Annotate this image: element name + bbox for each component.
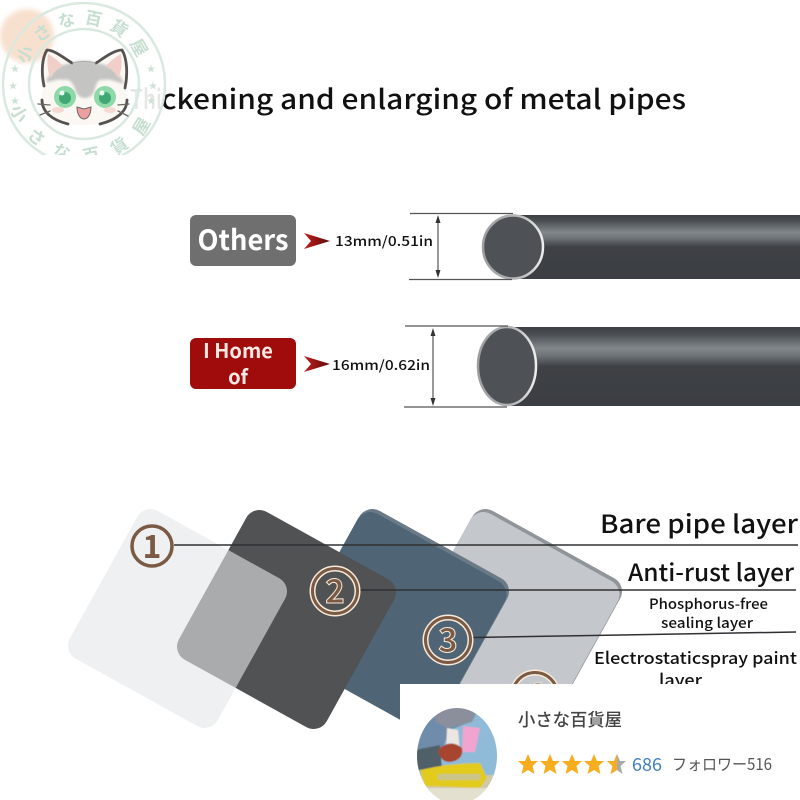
layer labels [594, 505, 799, 691]
stamp ring: ★ [148, 79, 158, 92]
logo stamp: shop cat badge [0, 2, 166, 155]
stamp ring: ★ [146, 62, 156, 75]
tile 1: bare pipe [83, 524, 272, 713]
dimension lines [404, 326, 508, 407]
label: electrostatic spray paint layer: layer [659, 667, 702, 691]
review count: 686 [632, 751, 662, 777]
card background [400, 684, 800, 800]
label: Others: Others [198, 219, 288, 259]
label: electrostatic spray paint layer [594, 645, 798, 691]
layered tiles diagram [83, 524, 607, 716]
followers: フォロワー516 [672, 751, 772, 775]
shop name: 小さな百貨屋 [518, 707, 622, 732]
arrow: red pointer [304, 233, 330, 249]
label: electrostatic spray paint layer: Electrostaticspray paint [594, 645, 798, 669]
label: phosphorus-free sealing layer [649, 594, 768, 633]
comparison row: I Home of [190, 326, 800, 407]
stamp ring: 小さな百貨屋 [10, 106, 152, 155]
stamp ring: ★ [10, 62, 20, 75]
number badge 4: 4 [525, 669, 545, 717]
stamp ring: ★ [10, 94, 20, 107]
number badge 1 [132, 522, 172, 568]
leader lines [174, 545, 798, 638]
label: I Home of: I Home [203, 335, 273, 364]
stamp ring: ★ [8, 79, 18, 92]
cat fur patch [46, 61, 124, 98]
stamp ring [2, 2, 166, 155]
comparison row: others [190, 214, 800, 280]
title: ckening and enlarging of metal pipes [161, 78, 686, 117]
arrow: red pointer [304, 356, 330, 372]
label: I Home of [190, 335, 296, 390]
dimension: 16mm: 16mm/0.62in [332, 354, 430, 374]
label: Others [190, 215, 296, 266]
number badge 2 [312, 565, 358, 614]
stamp ring: ★ [146, 94, 156, 107]
pipe: 13mm [483, 215, 800, 279]
number badge 2: 2 [325, 565, 345, 613]
pipe: 16mm [478, 327, 800, 406]
tile 4: spray paint [416, 524, 607, 716]
label: anti-rust layer: Anti-rust layer [628, 553, 794, 588]
dimension lines [409, 214, 513, 280]
tile 2: anti-rust [192, 525, 381, 714]
icon: cat face [38, 50, 129, 125]
number badge 1: 1 [143, 522, 161, 568]
label: phosphorus-free sealing layer: sealing layer [661, 613, 753, 633]
tile 3: sealing layer [303, 524, 494, 716]
stamp ring: 小さな百貨屋 [18, 10, 149, 62]
shop card [400, 684, 800, 800]
star rating [518, 754, 626, 774]
label: bare pipe layer: Bare pipe layer [600, 505, 799, 541]
title: Thi [130, 78, 162, 117]
label: I Home of: of [228, 361, 249, 390]
number badge 3: 3 [438, 614, 458, 662]
dimension: 13mm: 13mm/0.51in [335, 230, 433, 250]
shop avatar [415, 706, 499, 800]
stamp blossom [0, 9, 54, 63]
number badge 3 [426, 614, 470, 662]
number badge 4 [512, 669, 558, 718]
label: phosphorus-free sealing layer: Phosphorus-free [649, 594, 768, 614]
